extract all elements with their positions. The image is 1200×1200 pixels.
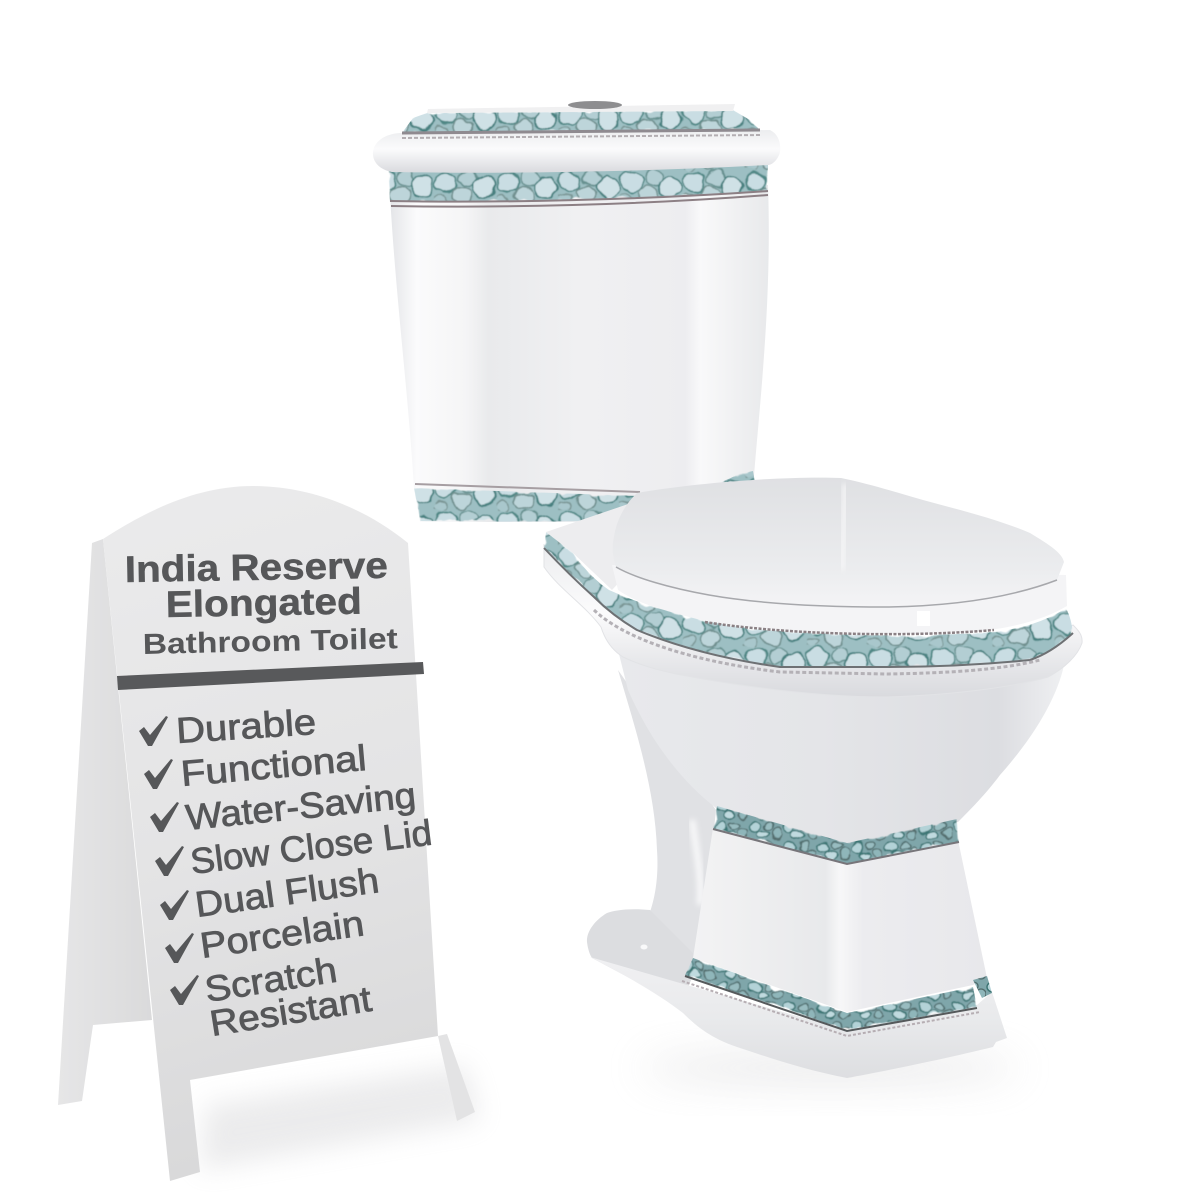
- checklist text: [175, 701, 434, 1044]
- foot plate: [587, 909, 700, 1005]
- pedestal body: [693, 828, 987, 1012]
- toilet trapway: [618, 670, 716, 960]
- trapway highlight: [692, 820, 701, 905]
- sign title: [124, 545, 398, 661]
- checklist text: Functional: [179, 737, 368, 794]
- sign title: India Reserve: [124, 545, 388, 590]
- sign shadow: [200, 1065, 480, 1170]
- icon: check marks: [139, 716, 199, 1005]
- sign back panel: [58, 539, 152, 1105]
- feature checklist: [139, 701, 434, 1044]
- checklist text: Scratch: [202, 949, 340, 1010]
- toilet shadow: [640, 1052, 1020, 1084]
- lid edge line: [616, 567, 1057, 607]
- checklist text: Porcelain: [197, 902, 367, 966]
- tank upper band: [388, 163, 768, 207]
- pedestal plinth: [590, 957, 1007, 1078]
- checklist text: Resistant: [207, 978, 374, 1044]
- sign title: Bathroom Toilet: [142, 623, 398, 661]
- lid crease: [842, 484, 845, 570]
- tank lower band: [414, 471, 755, 522]
- tank lid top: [427, 104, 735, 113]
- rim bead: [594, 610, 1040, 674]
- toilet bowl: [544, 478, 1082, 864]
- pedestal upper band: [713, 806, 959, 864]
- seat ring: [612, 565, 1067, 634]
- bowl deck: [546, 500, 640, 590]
- bowl rim: [544, 545, 1082, 697]
- seat highlight: [917, 611, 930, 626]
- bowl band: [544, 532, 1073, 667]
- toilet pedestal: [590, 828, 1007, 1078]
- sign divider bar: [117, 662, 424, 690]
- toilet lid: [613, 478, 1064, 607]
- a-frame sign: [58, 486, 475, 1181]
- checklist text: Slow Close Lid: [188, 812, 434, 882]
- sign front board: [103, 486, 438, 1181]
- checklist text: Durable: [175, 701, 317, 751]
- pedestal lower band: [682, 958, 992, 1036]
- tank rim: [373, 130, 780, 173]
- tank body: [390, 185, 769, 522]
- sign title: Elongated: [165, 581, 362, 625]
- checklist text: Water-Saving: [184, 774, 418, 838]
- sign right leg: [438, 1034, 475, 1121]
- tank lid band: [402, 110, 762, 138]
- checklist text: Dual Flush: [193, 859, 381, 925]
- flush button: [568, 101, 622, 109]
- bowl body: [618, 650, 1065, 845]
- bolt hole: [640, 944, 648, 950]
- toilet tank: [373, 101, 780, 522]
